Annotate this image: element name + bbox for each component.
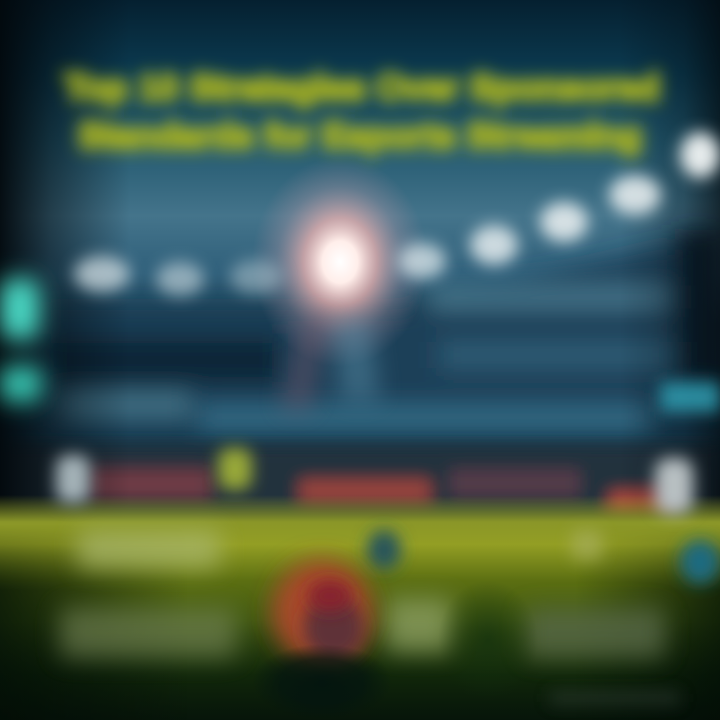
panel: small right block [572,530,602,560]
panel: right text block [525,608,665,658]
pitch bottom fade [0,620,720,720]
players in background [56,448,693,514]
pitch edge vignette [0,525,720,720]
dark patch on pitch [438,580,538,700]
red ball [252,560,392,720]
panel: centre text block [386,598,452,652]
panel: upper left text block [78,530,220,568]
left screen glow [0,278,42,402]
panel: lower left text block [60,608,236,658]
right screen glow [660,382,720,412]
title: Top 10 Strategies Over Sponsored [64,67,660,108]
pitch [0,495,720,720]
lens flare [252,157,428,410]
teal ball at right edge [680,540,720,584]
title [64,67,660,156]
floodlights row [74,132,720,296]
crowd band [0,445,720,516]
stadium stands [40,230,720,433]
footer text smudge [550,692,680,704]
title: Standards for Esports Streaming [78,115,642,156]
small teal ball [367,530,401,570]
